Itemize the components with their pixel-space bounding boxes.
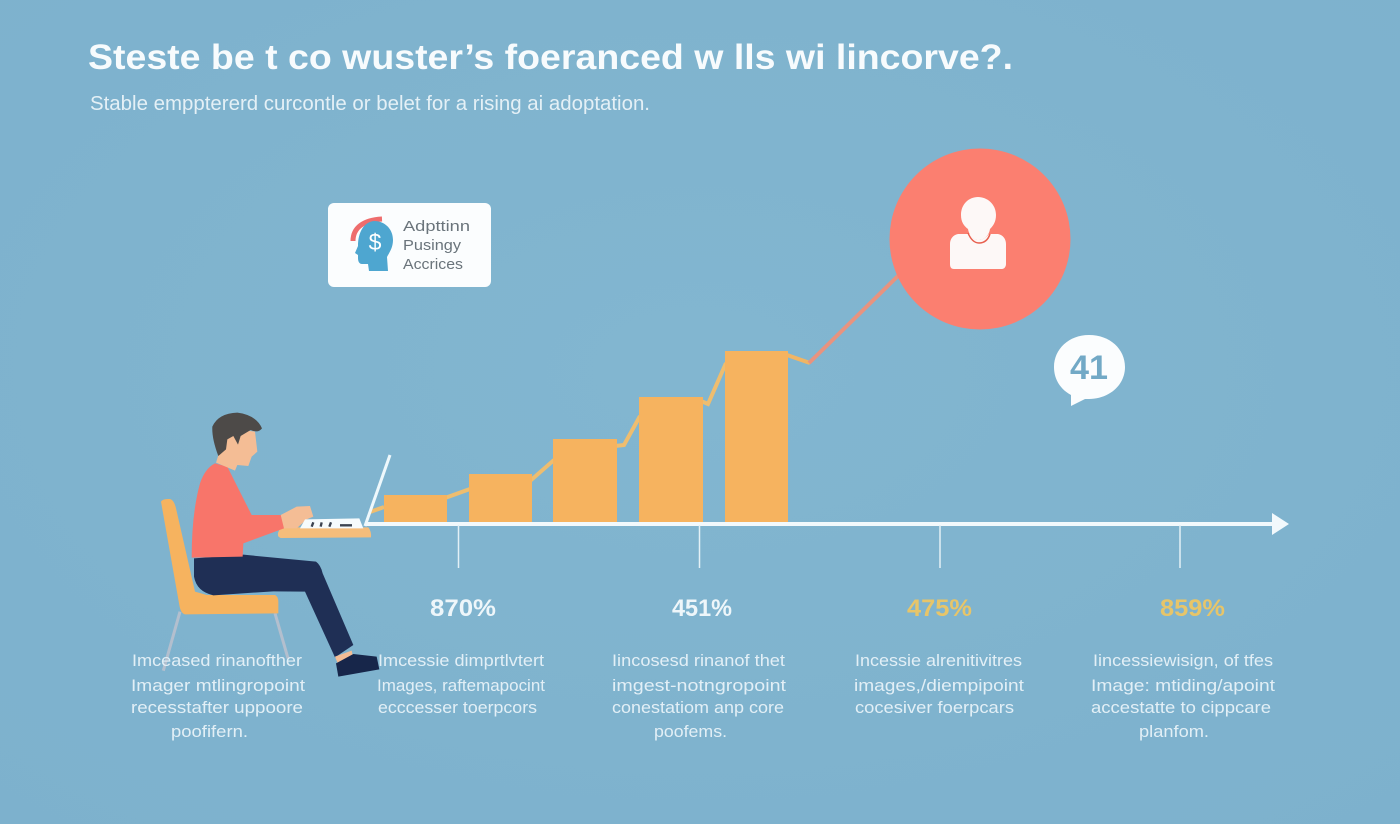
column 4 text: cocesiver foerpcars xyxy=(855,699,1014,717)
card label: Adpttinn xyxy=(403,219,470,235)
stat: 859%: 859% xyxy=(1160,595,1225,622)
column 1 text: Imager mtlingropoint xyxy=(131,677,305,695)
column 1 text: poofifern. xyxy=(171,723,248,741)
column 1 text: recesstafter uppoore xyxy=(131,699,303,717)
connector line to user circle xyxy=(809,274,900,363)
axis arrow xyxy=(365,513,1289,535)
column 3 text: poofems. xyxy=(654,723,727,741)
column 3 text: Iincosesd rinanof thet xyxy=(612,652,785,670)
column 5 text xyxy=(1091,652,1275,741)
card label xyxy=(403,219,470,273)
laptop xyxy=(300,455,390,528)
stat: 475%: 475% xyxy=(907,595,972,622)
icon: head with dollar sign xyxy=(353,219,393,271)
desk xyxy=(278,527,371,538)
user circle xyxy=(890,148,1070,330)
column 1 text: Imceased rinanofther xyxy=(132,652,303,670)
column 2 text: Imcessie dimprtlvtert xyxy=(378,652,544,670)
card label: Accrices xyxy=(403,257,463,273)
pants xyxy=(194,555,353,657)
shirt xyxy=(192,463,284,558)
column 3 text: imgest-notngropoint xyxy=(612,677,786,695)
icon: head with dollar sign: $ xyxy=(369,229,382,255)
head xyxy=(212,413,262,471)
column 1 text xyxy=(131,652,305,741)
chair xyxy=(161,499,288,671)
axis ticks xyxy=(458,525,1180,568)
stat: 870%: 870% xyxy=(430,595,496,622)
bar chart xyxy=(384,351,788,523)
card label: Pusingy xyxy=(403,238,462,254)
column 4 text: images,/diempipoint xyxy=(854,677,1024,695)
speech bubble: 41: 41 xyxy=(1070,349,1108,387)
shoe xyxy=(335,651,379,677)
stat: 451%: 451% xyxy=(672,595,732,622)
icon card: adoption pricing xyxy=(328,203,491,287)
column 4 text xyxy=(854,652,1024,717)
icon: user xyxy=(950,197,1006,269)
column 5 text: accestatte to cippcare xyxy=(1091,699,1271,717)
subtitle: Stable empptererd curcontle or belet for a rising ai adoptation. xyxy=(90,93,650,115)
trend line connecting bars xyxy=(370,355,810,512)
column 2 text: ecccesser toerpcors xyxy=(378,699,537,717)
column 2 text: Images, raftemapocint xyxy=(377,677,545,695)
column 2 text xyxy=(377,652,545,717)
title: Steste be t co wuster’s foeranced w lls wi lincorve?. xyxy=(88,38,1013,77)
column 3 text xyxy=(612,652,786,741)
column 3 text: conestatiom anp core xyxy=(612,699,784,717)
speech bubble: 41 xyxy=(1054,335,1125,406)
column 5 text: planfom. xyxy=(1139,723,1209,741)
column 5 text: Iincessiewisign, of tfes xyxy=(1093,652,1273,670)
person at laptop xyxy=(161,413,390,677)
column 5 text: Image: mtiding/apoint xyxy=(1091,677,1275,695)
column 4 text: Incessie alrenitivitres xyxy=(855,652,1022,670)
arm hand xyxy=(281,506,313,528)
